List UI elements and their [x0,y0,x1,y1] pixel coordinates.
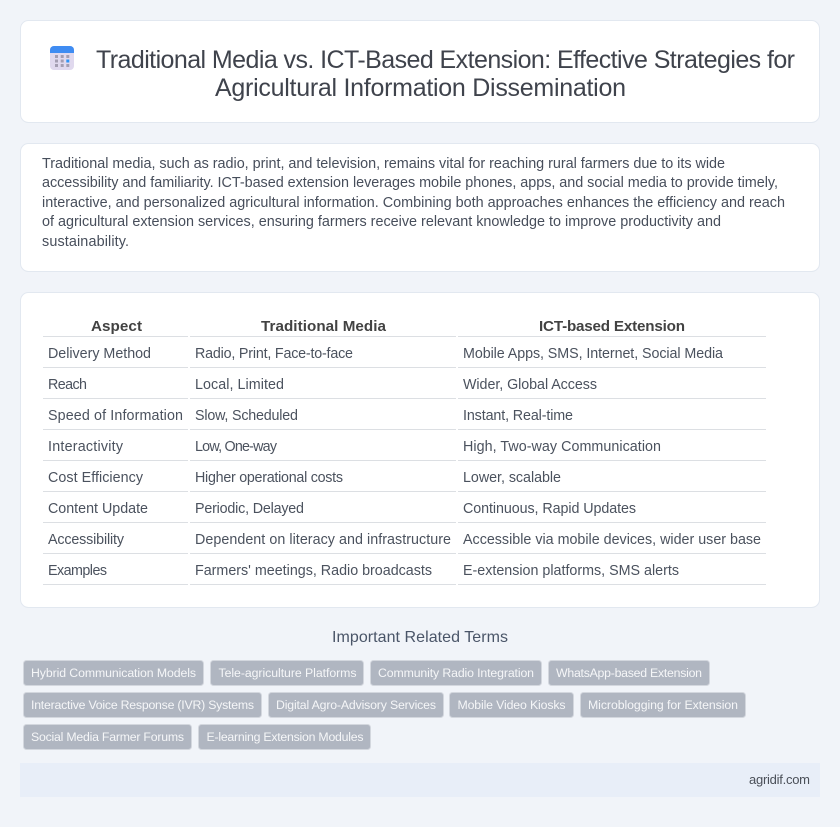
row: reach: Reach [48,377,87,393]
tag: mobile video kiosks: Mobile Video Kiosks [458,698,566,712]
tag: tele-agriculture platforms [210,660,364,686]
tag: interactive voice response: Interactive Voice Response (IVR) Systems [31,698,254,712]
row: speed of information: Slow, Scheduled [195,408,298,424]
row: accessibility [48,532,761,548]
row: content update [48,501,636,517]
table header row: ICT-based Extension [539,318,685,335]
footer bar: agridif.com [749,772,810,787]
text block: summary paragraph: of agricultural extension services, ensuring farmers receive relevant knowledge to improve productivity and [42,214,721,230]
tag: microblogging for extension [580,692,746,718]
row: speed of information: Speed of Information [48,408,183,424]
row: speed of information: Instant, Real-time [463,408,573,424]
row: cost efficiency: Higher operational costs [195,470,343,486]
row: accessibility: Dependent on literacy and infrastructure [195,532,451,548]
tag: whatsapp-based extension [548,660,710,686]
row: delivery method: Radio, Print, Face-to-face [195,346,353,362]
text block: summary paragraph: accessibility and familiarity. ICT-based extension leverages mobile phones, apps, and social media to provide timely, [42,175,778,191]
row: examples [48,563,679,579]
row: reach: Local, Limited [195,377,284,393]
row: reach [48,377,597,393]
row: cost efficiency: Cost Efficiency [48,470,144,486]
panel: summary text [20,144,820,272]
text block: summary paragraph: Traditional media, such as radio, print, and television, remains vital for reaching rural farmers due to its wide [42,156,725,172]
row: examples: E-extension platforms, SMS alerts [463,563,679,579]
tag: mobile video kiosks [450,692,574,718]
title [96,46,795,102]
row: cost efficiency [48,470,561,486]
tag: social media farmer forums [24,724,192,750]
row: content update: Content Update [48,501,148,517]
row: interactivity [48,439,661,455]
text block: summary paragraph: interactive, and personalized agricultural information. Combining both approaches enhances the efficiency and reach [42,195,785,211]
tag: hybrid communication models [24,660,204,686]
row: interactivity: Low, One-way [195,439,278,455]
tag: social media farmer forums: Social Media Farmer Forums [31,730,184,744]
row: reach: Wider, Global Access [463,377,597,393]
row: speed of information [48,408,573,424]
row: content update: Periodic, Delayed [195,501,304,517]
row: delivery method: Mobile Apps, SMS, Internet, Social Media [463,346,723,362]
row: accessibility: Accessibility [48,532,125,548]
tag: community radio integration: Community Radio Integration [378,666,534,680]
tag: community radio integration [370,660,542,686]
heading: important related terms: Important Related Terms [332,629,508,646]
table header row: Traditional Media [261,318,387,335]
row: accessibility: Accessible via mobile devices, wider user base [463,532,761,548]
table header row [91,318,685,335]
tag: interactive voice response [24,692,262,718]
text block: summary paragraph: sustainability. [42,234,129,250]
tag: tele-agriculture platforms: Tele-agriculture Platforms [218,666,356,680]
row: cost efficiency: Lower, scalable [463,470,561,486]
row: interactivity: High, Two-way Communication [463,439,661,455]
row: content update: Continuous, Rapid Updates [463,501,636,517]
tag: digital agro-advisory services: Digital Agro-Advisory Services [276,698,436,712]
tag: e-learning extension modules: E-learning Extension Modules [206,730,364,744]
tag: hybrid communication models: Hybrid Communication Models [31,666,196,680]
footer bar [20,763,820,797]
tag: e-learning extension modules [198,724,370,750]
row: delivery method [48,346,723,362]
icon: calendar [50,46,74,70]
row: interactivity: Interactivity [48,439,124,455]
title: Traditional Media vs. ICT-Based Extension: Effective Strategies for [96,46,795,74]
tag: microblogging for extension: Microblogging for Extension [588,698,738,712]
row: delivery method: Delivery Method [48,346,151,362]
panel: header [20,20,820,122]
row: examples: Farmers' meetings, Radio broadcasts [195,563,432,579]
text block: summary paragraph [42,156,785,250]
related terms tags [24,660,746,750]
title: Agricultural Information Dissemination [215,74,626,102]
tag: whatsapp-based extension: WhatsApp-based Extension [556,666,702,680]
row: examples: Examples [48,563,107,579]
panel: comparison table [20,292,820,608]
table header row: Aspect [91,318,142,335]
tag: digital agro-advisory services [268,692,444,718]
